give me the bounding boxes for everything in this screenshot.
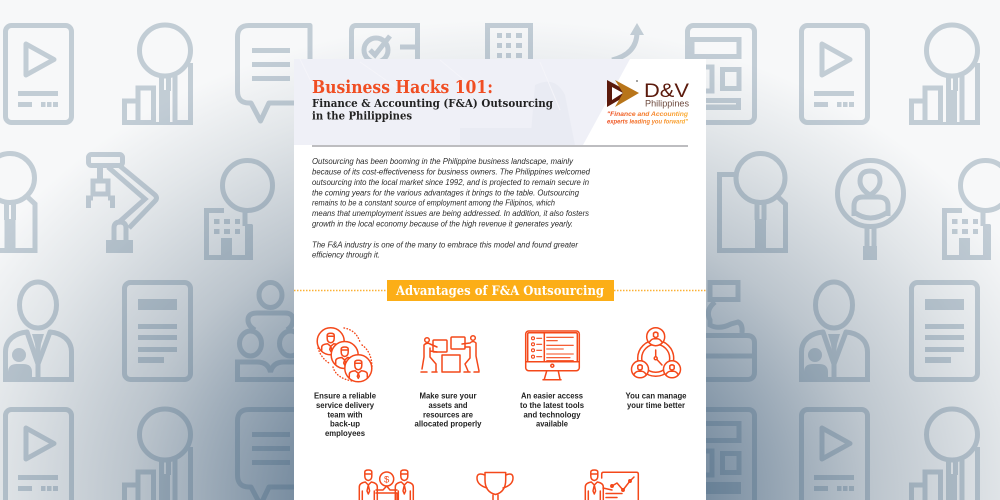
intro text: efficiency through it.	[312, 249, 380, 259]
caption: tools: An easier access	[521, 392, 584, 400]
caption: service delivery: team with	[328, 410, 363, 419]
intro text: remains to be a constant source of employment among the Filipinos, which	[312, 198, 555, 208]
caption: tools: and technology	[524, 410, 581, 419]
caption: tools: available	[536, 420, 569, 429]
icon: person at card	[685, 282, 754, 380]
section heading: advantages: Advantages of F&A Outsourcing	[395, 284, 604, 299]
icon: text document right	[912, 282, 978, 380]
title: Business Hacks 101:	[312, 77, 493, 98]
panel: infographic page	[294, 59, 706, 500]
section heading: advantages	[294, 280, 706, 301]
caption: service delivery	[314, 392, 377, 438]
icon: play document bottom	[6, 410, 72, 500]
intro text	[312, 156, 590, 259]
icon: allocating assets	[421, 336, 479, 372]
header rule	[312, 145, 688, 147]
icon: robot arm	[88, 154, 156, 253]
logo: D&V Philippines: D&V	[644, 81, 689, 102]
icon: handshake over money: $	[384, 474, 390, 486]
icon: document magnifier right	[720, 154, 786, 253]
subtitle	[312, 97, 553, 122]
intro text: Outsourcing has been booming in the Philippine business landscape, mainly	[312, 156, 574, 166]
caption: assets	[414, 392, 482, 429]
caption: tools: to the latest tools	[520, 401, 585, 410]
icon: magnifier over bar chart	[122, 25, 193, 125]
caption: assets: Make sure your	[420, 392, 476, 400]
icon: news layout bottom	[688, 410, 754, 500]
intro text: means that unemployment issues are being addressed. In addition, it also fosters	[312, 208, 590, 218]
intro text: because of its cost-effectiveness for business owners. The Philippines welcomed	[312, 166, 590, 176]
caption: time: your time better	[627, 401, 685, 410]
logo: D&V Philippines: Philippines	[645, 98, 689, 110]
icon: speech bubble	[238, 26, 310, 121]
icon: magnifier over bar chart right	[909, 25, 980, 125]
subtitle: in the Philippines	[312, 110, 412, 122]
icon: trophy	[477, 472, 513, 500]
icon: logo arrow mark	[607, 80, 639, 107]
icon: news layout	[688, 26, 754, 122]
icon: play document bottom right	[802, 410, 868, 500]
caption: service delivery: employees	[325, 429, 366, 438]
icon: building magnifier right	[944, 160, 1000, 260]
icon: computer monitor	[526, 331, 579, 380]
icon: handshake over money	[359, 470, 413, 500]
header banner	[294, 59, 630, 145]
logo: D&V Philippines	[607, 80, 689, 126]
logo: D&V Philippines: "Finance and Accounting	[607, 111, 688, 118]
caption: service delivery: service delivery	[316, 401, 375, 410]
icon: rising arrow	[612, 23, 644, 60]
caption: assets: allocated properly	[414, 420, 482, 429]
caption: time: You can manage	[626, 392, 687, 400]
icon: checklist	[352, 25, 420, 70]
icon: people group	[238, 282, 304, 380]
icon: person magnifier	[838, 160, 904, 260]
intro text: growth in the local economy because of the high revenue it generates yearly.	[312, 219, 573, 229]
intro text: outsourcing into the local market since 1992, and is projected to remain secure in	[312, 177, 589, 187]
icon: office building	[488, 26, 530, 70]
caption: service delivery: Ensure a reliable	[314, 392, 377, 400]
icon: speech bubble bottom	[238, 410, 310, 500]
icon: play document	[6, 26, 72, 122]
icon: play document right	[802, 26, 868, 122]
caption: service delivery: back-up	[330, 420, 360, 429]
icon: magnifier chart bottom	[122, 409, 193, 500]
icon: service delivery team	[317, 328, 372, 382]
icon: business person right	[799, 282, 870, 382]
icon: business person	[3, 282, 74, 382]
intro text: The F&A industry is one of the many to embrace this model and found greater	[312, 239, 579, 249]
caption: assets: resources are	[423, 410, 474, 419]
caption: tools	[520, 392, 585, 429]
icon: presenter with chart	[585, 470, 638, 500]
subtitle: Finance & Accounting (F&A) Outsourcing	[312, 97, 553, 110]
caption: time	[626, 392, 687, 410]
intro text: the coming years for the various advantages it brings to the table. Outsourcing	[312, 187, 579, 197]
logo: D&V Philippines: experts leading you forward"	[607, 118, 688, 126]
icon: magnifier chart bottom right	[909, 409, 980, 500]
icon: clock and team	[632, 328, 680, 378]
icon: building magnifier	[206, 160, 272, 260]
icon: document magnifier left	[0, 154, 35, 253]
icon: text document	[124, 282, 190, 380]
caption: assets: assets and	[428, 401, 468, 410]
